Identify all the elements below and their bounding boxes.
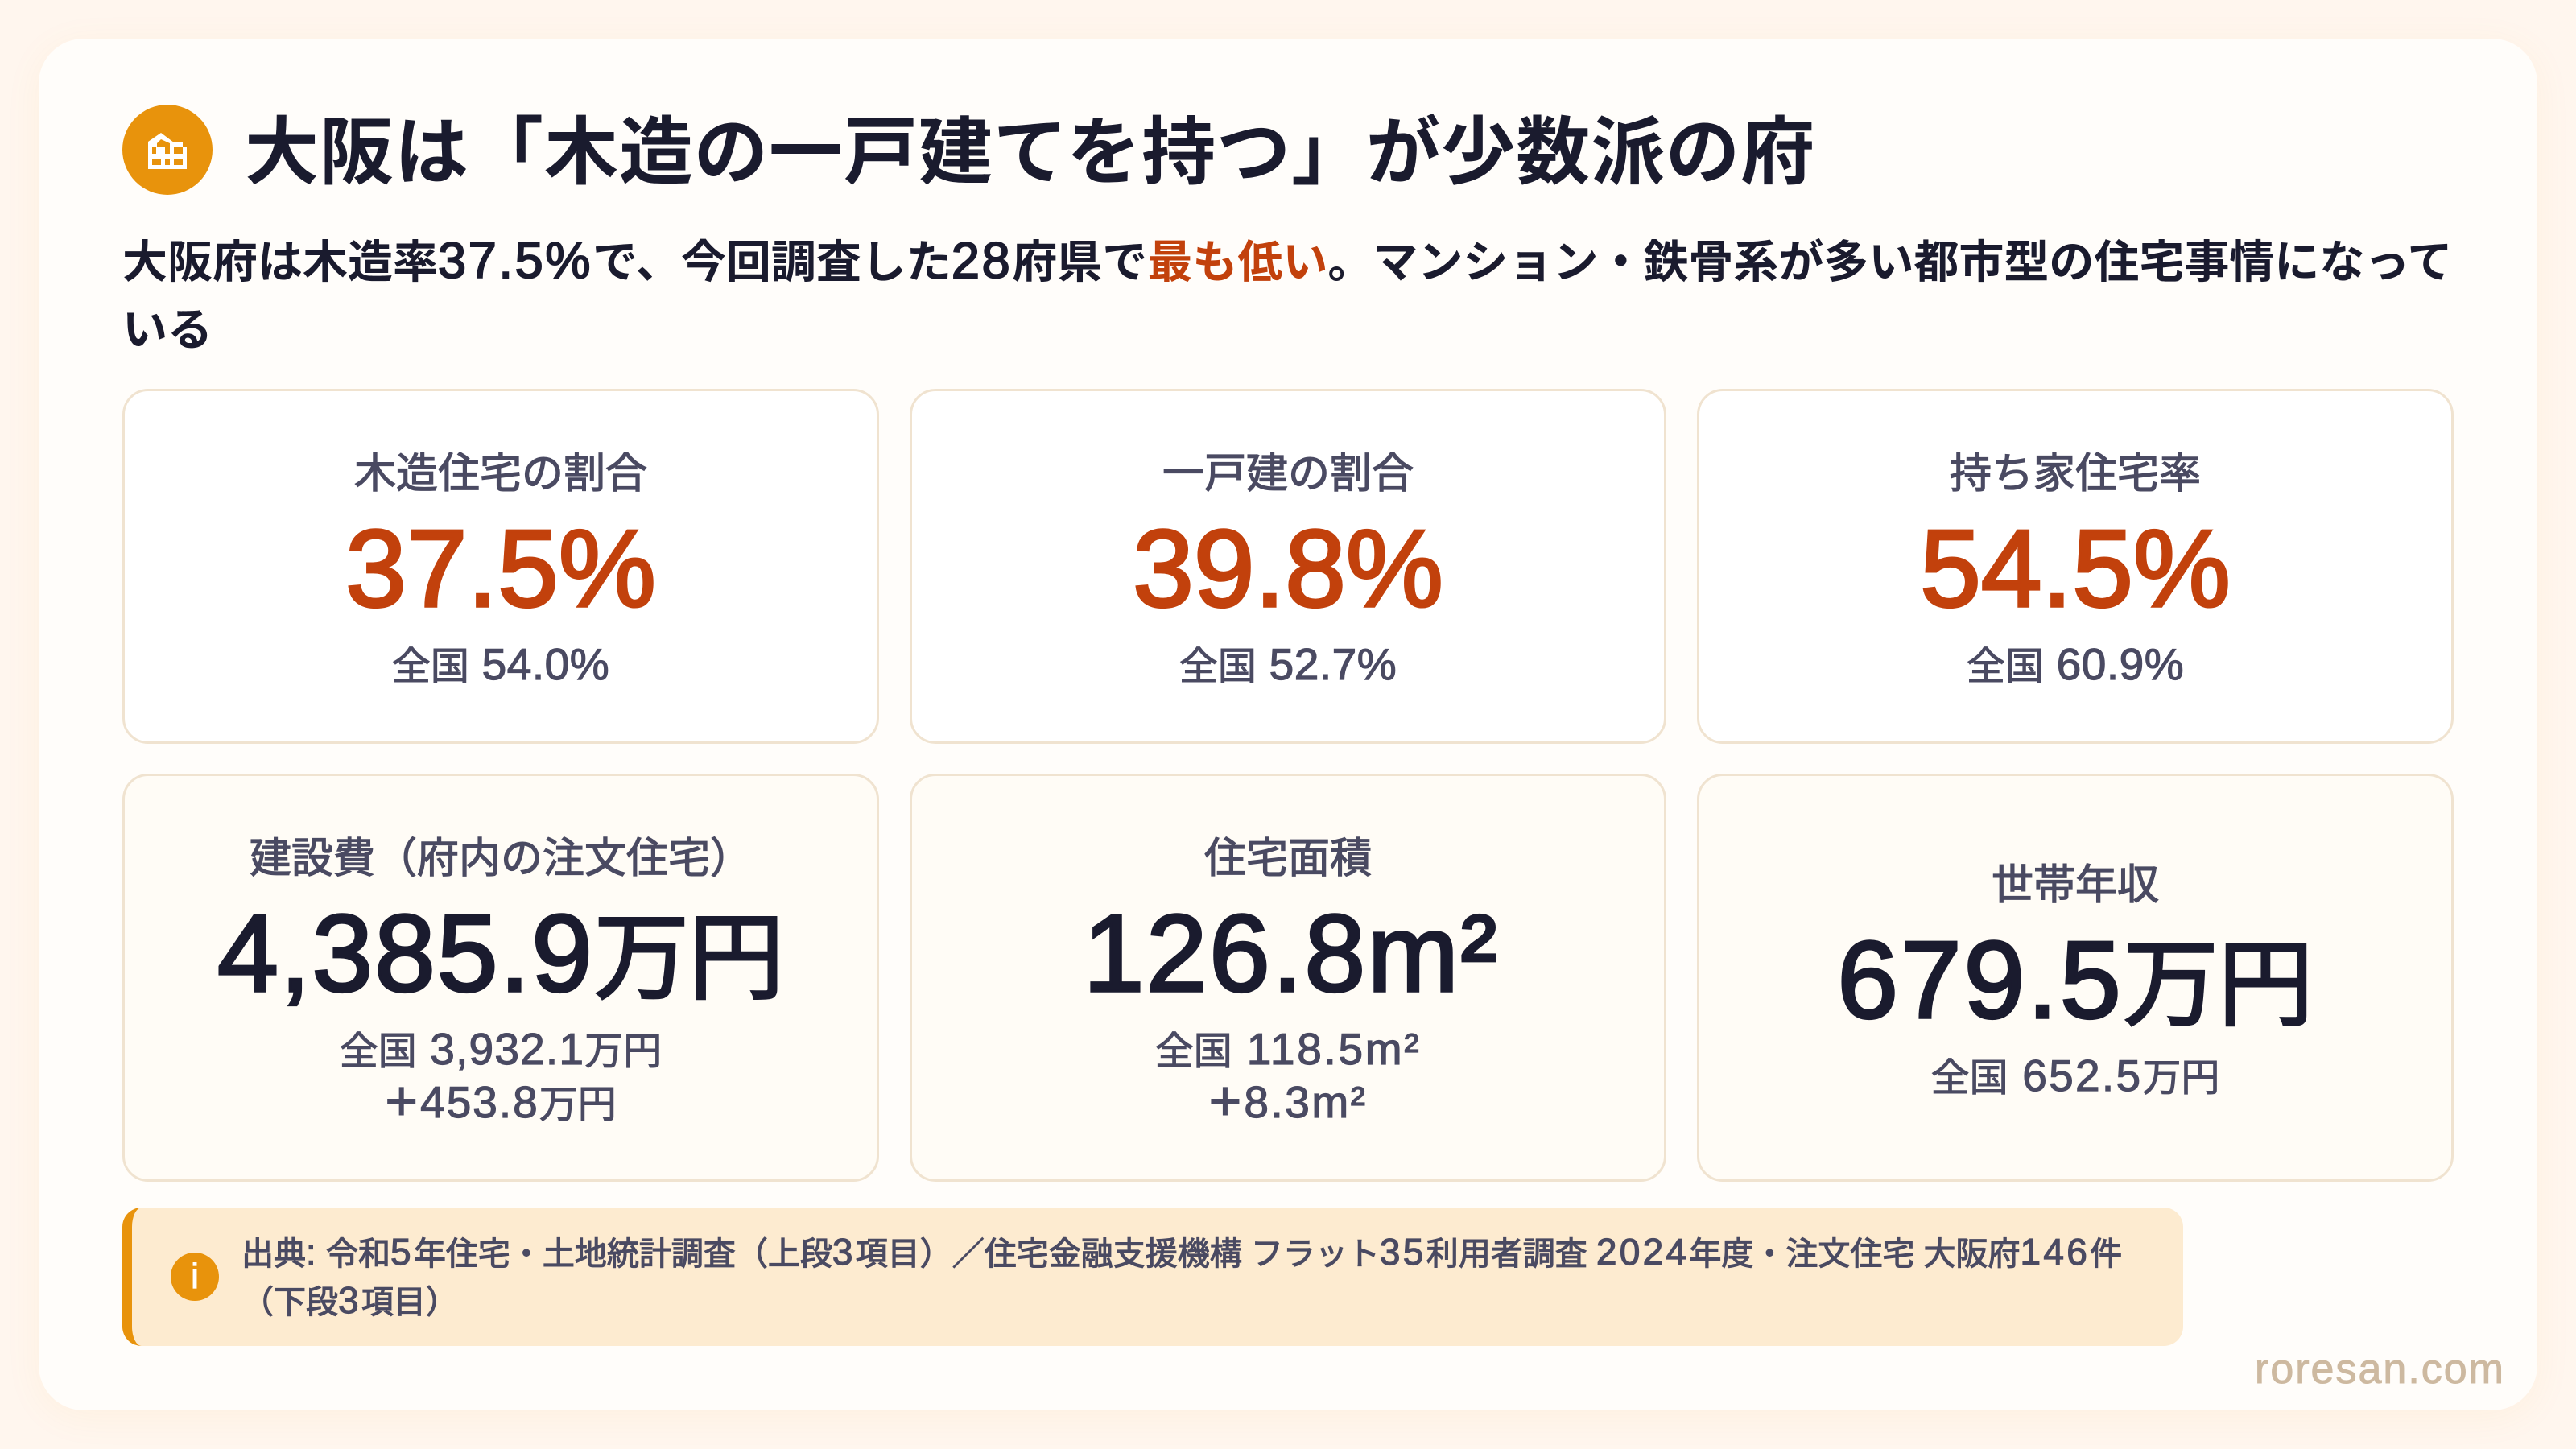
icon: info xyxy=(171,1253,219,1301)
panel: construction cost: 建設費（府内の注文住宅） xyxy=(250,836,752,882)
panel: wood housing share: 全国 54.0% xyxy=(392,639,609,689)
source text: （下段3項目） xyxy=(242,1279,458,1321)
source text: 出典: 令和5年住宅・土地統計調査（上段3項目）／住宅金融支援機構 フラット35利用者調査 2024年度・注文住宅 大阪府146件 xyxy=(242,1231,2122,1273)
panel: home ownership rate: 持ち家住宅率 xyxy=(1950,451,2201,497)
panel: floor area: 126.8m² xyxy=(1084,892,1499,1014)
panel: wood housing share: 木造住宅の割合 xyxy=(354,451,647,497)
panel: floor area xyxy=(910,774,1666,1182)
panel: household income: 全国 652.5万円 xyxy=(1931,1050,2219,1100)
watermark: roresan.com xyxy=(2255,1346,2505,1393)
panel: floor area: 全国 118.5m² xyxy=(1155,1024,1421,1074)
panel: household income: 世帯年収 xyxy=(1992,861,2159,908)
source text xyxy=(242,1231,2122,1321)
panel: wood housing share xyxy=(122,389,879,744)
panel: detached house share xyxy=(910,389,1666,744)
panel: home ownership rate: 全国 60.9% xyxy=(1967,639,2184,689)
panel: household income: 679.5万円 xyxy=(1837,918,2314,1040)
panel: construction cost: 4,385.9万円 xyxy=(217,892,784,1014)
panel: home ownership rate xyxy=(1697,389,2454,744)
icon: info: i xyxy=(191,1257,199,1296)
panel: floor area: 住宅面積 xyxy=(1204,836,1372,882)
panel: home ownership rate: 54.5% xyxy=(1920,507,2231,630)
lead text: 大阪府は木造率37.5%で、今回調査した28府県で最も低い。マンション・鉄骨系が多い都市型の住宅事情になっている xyxy=(122,233,2453,355)
panel: wood housing share: 37.5% xyxy=(345,507,656,630)
panel: detached house share: 39.8% xyxy=(1133,507,1443,630)
panel: construction cost: 全国 3,932.1万円 xyxy=(340,1024,662,1074)
panel: construction cost: +453.8万円 xyxy=(385,1069,617,1132)
panel: detached house share: 全国 52.7% xyxy=(1179,639,1397,689)
panel: floor area: +8.3m² xyxy=(1209,1069,1367,1132)
title: 大阪は「木造の一戸建てを持つ」が少数派の府 xyxy=(245,112,1815,194)
panel: detached house share: 一戸建の割合 xyxy=(1162,451,1414,497)
panel: household income xyxy=(1697,774,2454,1182)
icon: building xyxy=(122,105,213,195)
source note panel xyxy=(122,1208,2183,1346)
panel: construction cost xyxy=(122,774,879,1182)
